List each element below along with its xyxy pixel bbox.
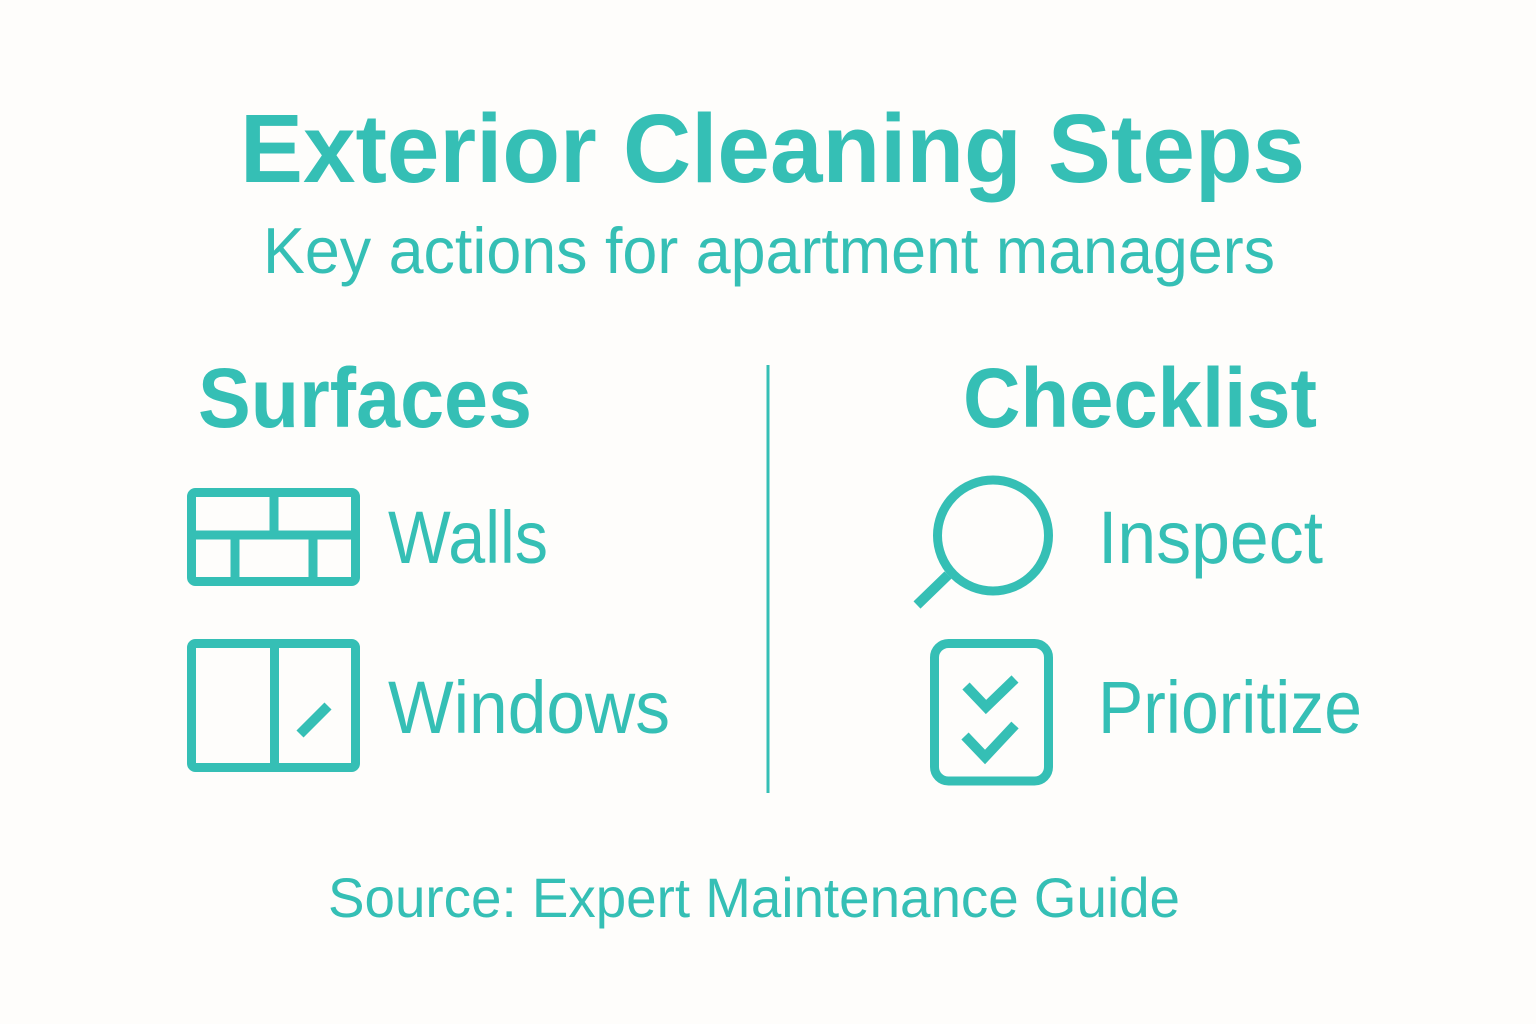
label: windows: Windows (388, 666, 670, 749)
label: walls: Walls (388, 496, 548, 579)
icon: checklist clipboard (934, 644, 1048, 781)
icon: magnifying glass (917, 480, 1048, 605)
heading: checklist: Checklist (963, 351, 1317, 445)
panel: surfaces (191, 351, 670, 768)
panel: checklist (917, 351, 1362, 781)
source note: Source: Expert Maintenance Guide (328, 866, 1180, 929)
label: inspect: Inspect (1098, 496, 1323, 579)
label: prioritize: Prioritize (1098, 666, 1362, 749)
icon: brick wall (191, 492, 356, 582)
heading: surfaces: Surfaces (198, 351, 532, 445)
icon: window (192, 643, 356, 768)
title: Exterior Cleaning Steps (240, 94, 1305, 203)
subtitle: Key actions for apartment managers (263, 214, 1275, 287)
center divider (766, 365, 770, 793)
